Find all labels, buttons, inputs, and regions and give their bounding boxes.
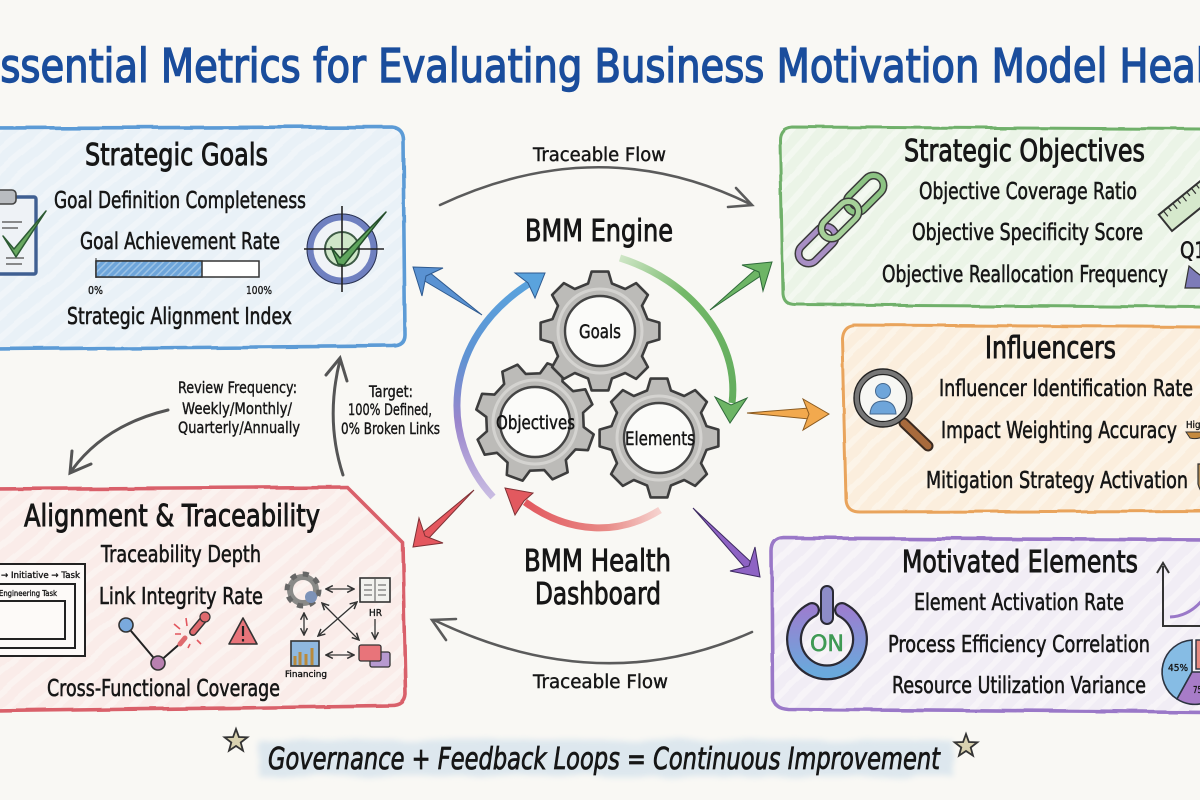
text: target: Target: — [368, 382, 413, 401]
gear: objectives — [459, 346, 611, 498]
footer text: Governance + Feedback Loops = Continuous Improvement — [268, 742, 941, 777]
arrow: central red arc — [505, 488, 660, 528]
panel: motivated elements — [772, 538, 1200, 712]
icon: cross-functional network: HR — [369, 608, 382, 619]
text: target — [341, 382, 440, 438]
metric: goal achievement rate: Goal Achievement Rate — [80, 229, 280, 255]
panel box: influencers — [842, 325, 1200, 512]
gear label: elements: Elements — [625, 428, 695, 450]
icon: nested hierarchy window: Engineering Task — [0, 589, 57, 598]
metric: strategic alignment index: Strategic Alignment Index — [67, 304, 292, 330]
progress bar: 0% — [88, 284, 103, 297]
icon: cross-functional network: Financing — [285, 670, 327, 680]
icon: cross-functional network — [285, 574, 390, 680]
arrow: to influencers — [747, 399, 829, 430]
icon: warning triangle — [229, 618, 257, 644]
progress bar — [88, 258, 272, 297]
metric: traceability depth: Traceability Depth — [100, 542, 261, 568]
arrow: bottom traceable flow — [432, 619, 752, 663]
label: bmm engine: BMM Engine — [525, 214, 673, 249]
icon: clipboard with check — [0, 190, 46, 274]
icon: ruler — [1159, 171, 1200, 231]
arrow: to strategic objectives — [710, 262, 772, 310]
icon: power on button — [794, 586, 860, 672]
icon: calendar fragment — [1185, 266, 1200, 288]
heading: strategic goals: Strategic Goals — [85, 138, 268, 173]
text: target: 0% Broken Links — [341, 419, 440, 438]
arrow: top traceable flow — [440, 167, 752, 207]
arrow: to alignment and traceability — [413, 490, 474, 547]
label: traceable flow bottom: Traceable Flow — [532, 672, 668, 693]
panel box: motivated elements — [772, 538, 1200, 712]
panel: alignment and traceability — [0, 487, 406, 711]
arrow: central blue-purple arc — [457, 273, 545, 497]
label: bmm health dashboard: BMM Health — [524, 544, 671, 579]
progress bar: 100% — [246, 284, 272, 297]
heading: influencers: Influencers — [985, 331, 1116, 366]
metric: cross-functional coverage: Cross-Functional Coverage — [47, 676, 280, 702]
arrow: to strategic goals — [413, 267, 482, 315]
panel box: strategic objectives — [780, 127, 1200, 307]
text: review frequency: Quarterly/Annually — [178, 418, 300, 437]
heading: strategic objectives: Strategic Objectives — [904, 134, 1145, 169]
panel: strategic goals — [0, 127, 405, 349]
text: review frequency: Weekly/Monthly/ — [182, 399, 293, 418]
gear: goals — [541, 272, 659, 390]
chart: pie: 45% — [1168, 663, 1188, 674]
chart: rising line — [1157, 563, 1200, 626]
icon: chain links — [794, 171, 888, 268]
arrow: target — [326, 358, 347, 475]
icon: magnifier with person — [854, 369, 928, 446]
icon: broken link chain — [119, 612, 210, 670]
gear label: objectives: Objectives — [496, 412, 575, 434]
metric: goal definition completeness: Goal Definition Completeness — [54, 188, 306, 214]
footer banner — [258, 740, 953, 777]
arrow: review frequency — [70, 410, 168, 473]
panel box: alignment and traceability — [0, 487, 406, 711]
arrow: central green arc — [620, 258, 747, 423]
gear: elements — [600, 379, 718, 497]
text: review frequency — [178, 378, 300, 437]
arrow: to motivated elements — [693, 508, 760, 577]
text: target: 100% Defined, — [348, 400, 432, 419]
heading: alignment and traceability: Alignment & Traceability — [24, 499, 320, 534]
label: traceable flow top: Traceable Flow — [532, 145, 666, 166]
label: bmm health dashboard: Dashboard — [535, 577, 661, 612]
chart: pie — [1162, 640, 1200, 704]
icon: high weighting scale — [1186, 420, 1200, 439]
icon: star left — [225, 729, 247, 751]
icon: star right — [955, 734, 977, 756]
gear label: goals: Goals — [579, 321, 621, 343]
icon: mitigation shield — [1198, 464, 1200, 496]
icon: target with check — [304, 206, 386, 292]
icon: nested hierarchy window — [0, 564, 85, 656]
icon: nested hierarchy window: → Initiative → Task — [1, 571, 81, 581]
heading: motivated elements: Motivated Elements — [902, 545, 1138, 580]
panel box: strategic goals — [0, 127, 405, 349]
text: review frequency: Review Frequency: — [178, 378, 297, 397]
icon: power on button: ON — [810, 632, 844, 657]
panel: strategic objectives — [780, 127, 1200, 307]
panel: influencers — [842, 325, 1200, 512]
metric: link integrity rate: Link Integrity Rate — [99, 584, 263, 610]
metric: element activation rate: Element Activation Rate — [914, 590, 1124, 616]
label: bmm health dashboard — [524, 544, 671, 612]
